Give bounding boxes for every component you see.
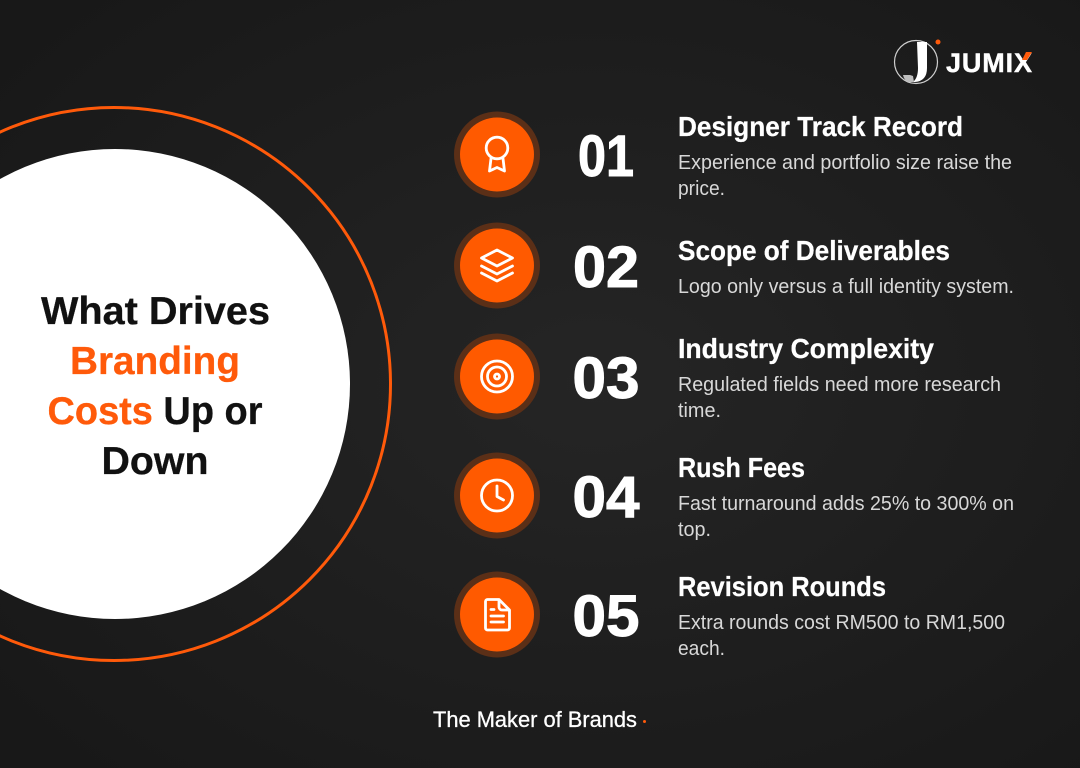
icon: ribbon [454,112,540,198]
item 01 [454,111,1012,200]
item 02 [454,222,1014,308]
number: 03 [572,346,640,411]
icon: layers [454,222,540,308]
hero circle with title [0,108,390,660]
heading: Scope of Deliverables [678,235,950,266]
icon: clock [454,452,540,538]
item 04: top. [678,518,711,541]
description: Extra rounds cost RM500 to RM1,500 [678,611,1005,634]
title: What Drives [41,290,270,333]
item 05 [454,571,1005,660]
item 05: each. [678,637,725,660]
heading: Rush Fees [678,452,805,483]
hero circle with title: Down [102,440,208,483]
number: 01 [578,124,634,189]
description: Regulated fields need more research [678,373,1001,396]
number: 04 [572,465,640,530]
hero circle with title: Branding [70,340,240,383]
item 03: time. [678,399,721,422]
hero circle with title: Costs Up or [48,390,262,433]
item 03 [454,333,1001,422]
heading: Designer Track Record [678,111,963,142]
heading: Revision Rounds [678,571,886,602]
number: 02 [573,235,639,300]
item 04 [454,452,1014,541]
icon: document [454,572,540,658]
number: 05 [572,584,640,649]
wordmark: JUMIX [946,48,1032,78]
heading: Industry Complexity [678,333,934,364]
footer tagline: The Maker of Brands [433,707,637,732]
item 01: price. [678,177,725,200]
logo: JUMIX [894,40,1032,84]
description: Logo only versus a full identity system. [678,275,1014,298]
icon: target [454,334,540,420]
description: Experience and portfolio size raise the [678,151,1012,174]
orange ring [0,108,390,660]
description: Fast turnaround adds 25% to 300% on [678,492,1014,515]
logo mark [894,40,938,84]
white circle [0,149,350,619]
